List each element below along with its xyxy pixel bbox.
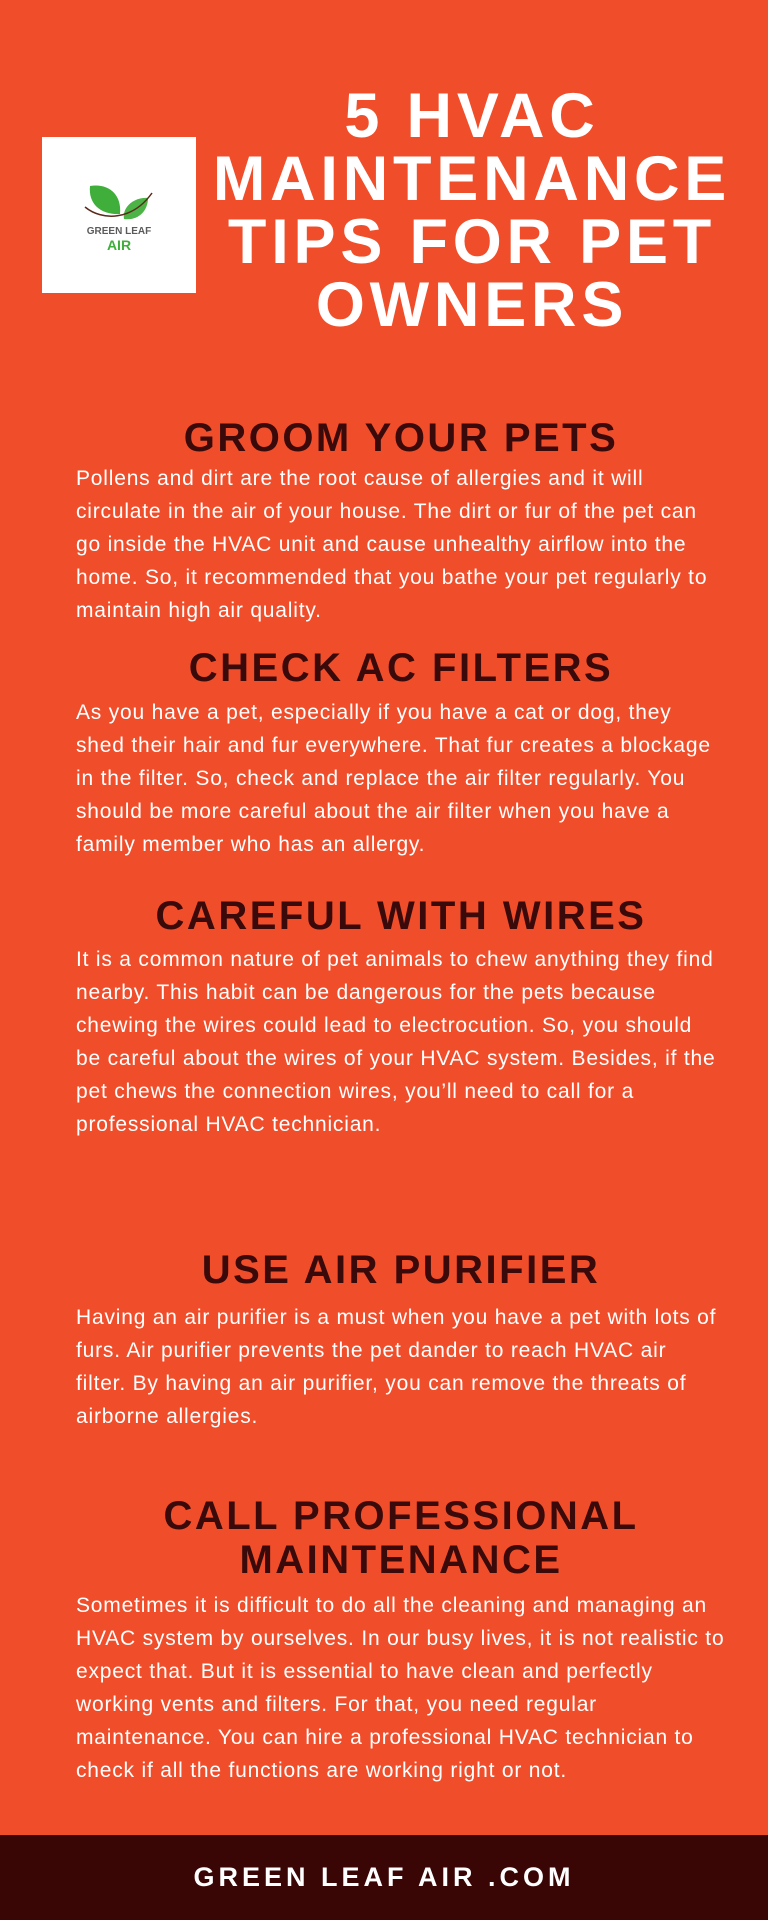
text: purifier: furs. Air purifier prevents the pet dander to reach HVAC air xyxy=(76,1339,666,1362)
heading: professional xyxy=(163,1494,639,1582)
heading: filters: CHECK AC FILTERS xyxy=(189,646,613,690)
text: groom: go inside the HVAC unit and cause unhealthy airflow into the xyxy=(76,533,686,556)
text: groom: circulate in the air of your house. The dirt or fur of the pet can xyxy=(76,500,697,523)
title: 5 HVAC xyxy=(344,81,600,151)
text: groom: Pollens and dirt are the root cause of allergies and it will xyxy=(76,467,643,490)
icon: leaves xyxy=(84,186,152,220)
logo text xyxy=(87,226,151,253)
logo box xyxy=(42,137,196,293)
text: filters: family member who has an allergy. xyxy=(76,833,425,856)
footer: GREEN LEAF AIR .COM xyxy=(193,1862,574,1892)
footer xyxy=(0,1835,768,1920)
title: TIPS FOR PET xyxy=(228,207,716,277)
text: purifier: filter. By having an air purifier, you can remove the threats of xyxy=(76,1372,686,1395)
text: professional: Sometimes it is difficult to do all the cleaning and managing an xyxy=(76,1594,707,1617)
text: groom xyxy=(76,467,707,622)
text: wires: pet chews the connection wires, you’ll need to call for a xyxy=(76,1080,634,1103)
text: professional: HVAC system by ourselves. In our busy lives, it is not realistic to xyxy=(76,1627,724,1650)
heading: professional: CALL PROFESSIONAL xyxy=(163,1494,639,1538)
text: filters xyxy=(76,701,711,856)
logo text: GREEN LEAF xyxy=(87,226,151,237)
text: wires: It is a common nature of pet animals to chew anything they find xyxy=(76,948,714,971)
text: wires xyxy=(76,948,715,1136)
text: filters: should be more careful about the air filter when you have a xyxy=(76,800,670,823)
text: filters: in the filter. So, check and replace the air filter regularly. You xyxy=(76,767,685,790)
text: filters: shed their hair and fur everywhere. That fur creates a blockage xyxy=(76,734,711,757)
text: groom: maintain high air quality. xyxy=(76,599,322,622)
text: wires: be careful about the wires of your HVAC system. Besides, if the xyxy=(76,1047,715,1070)
heading: purifier: USE AIR PURIFIER xyxy=(202,1248,600,1292)
text: wires: professional HVAC technician. xyxy=(76,1113,381,1136)
text: professional: check if all the functions are working right or not. xyxy=(76,1759,567,1782)
logo text: AIR xyxy=(107,237,131,253)
text: wires: chewing the wires could lead to electrocution. So, you should xyxy=(76,1014,692,1037)
text: filters: As you have a pet, especially if you have a cat or dog, they xyxy=(76,701,672,724)
text: professional: expect that. But it is essential to have clean and perfectly xyxy=(76,1660,653,1683)
text: groom: home. So, it recommended that you bathe your pet regularly to xyxy=(76,566,707,589)
title: MAINTENANCE xyxy=(213,144,731,214)
heading: professional: MAINTENANCE xyxy=(239,1538,563,1582)
text: purifier: Having an air purifier is a must when you have a pet with lots of xyxy=(76,1306,716,1329)
heading: groom: GROOM YOUR PETS xyxy=(184,416,618,460)
text: purifier: airborne allergies. xyxy=(76,1405,258,1428)
title: OWNERS xyxy=(316,270,628,340)
text: wires: nearby. This habit can be dangerous for the pets because xyxy=(76,981,656,1004)
heading: wires: CAREFUL WITH WIRES xyxy=(156,894,646,938)
text: professional: working vents and filters. For that, you need regular xyxy=(76,1693,597,1716)
title xyxy=(213,81,731,340)
text: professional: maintenance. You can hire a professional HVAC technician to xyxy=(76,1726,694,1749)
text: professional xyxy=(76,1594,724,1782)
text: purifier xyxy=(76,1306,716,1428)
